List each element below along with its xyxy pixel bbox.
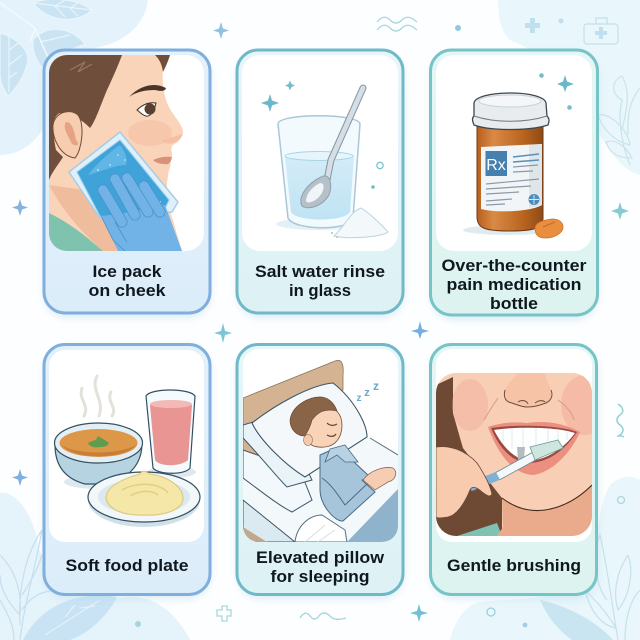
leaves top left <box>0 0 92 96</box>
label <box>256 549 384 586</box>
leaves right <box>598 76 640 165</box>
label: Ice pack <box>92 263 162 281</box>
label: Gentle brushing <box>447 557 581 575</box>
icon: smile with toothbrush <box>436 373 609 536</box>
label <box>88 263 166 300</box>
icon: sleeping z letters: z <box>356 393 362 404</box>
icon: person sleeping on elevated pillows <box>243 360 398 542</box>
icon: face with ice pack <box>49 55 183 251</box>
panel: gentle brushing <box>430 344 609 594</box>
label: Salt water rinse <box>255 263 385 281</box>
label <box>442 257 587 313</box>
label: Soft food plate <box>66 557 188 575</box>
label: for sleeping <box>270 568 370 586</box>
panel: elevated pillow for sleeping <box>237 344 403 594</box>
label: in glass <box>289 282 351 300</box>
label: on cheek <box>88 282 166 300</box>
leaves bottom right <box>540 600 613 640</box>
panel: soft food plate <box>44 344 210 594</box>
icon: sleeping z letters: z <box>364 387 370 399</box>
icon: prescription bottle <box>463 73 574 238</box>
card shadows <box>44 54 598 599</box>
icon: glass with spoon and salt <box>261 80 388 238</box>
panel: ice pack on cheek <box>44 50 210 313</box>
panel: over-the-counter pain medication <box>430 50 598 315</box>
icon: sleeping z letters: z <box>373 379 379 393</box>
label: pain medication <box>446 276 582 294</box>
label <box>255 263 385 300</box>
icon: prescription bottle: Rx <box>486 157 506 174</box>
leaves bottom left <box>0 530 70 640</box>
label: bottle <box>490 295 538 313</box>
label: Over-the-counter <box>442 257 587 275</box>
panel: salt water rinse <box>237 50 403 313</box>
label: Elevated pillow <box>256 549 384 567</box>
icon: sleeping z letters <box>356 379 379 404</box>
icon: soup bowl, smoothie and mashed potatoes <box>54 376 200 527</box>
